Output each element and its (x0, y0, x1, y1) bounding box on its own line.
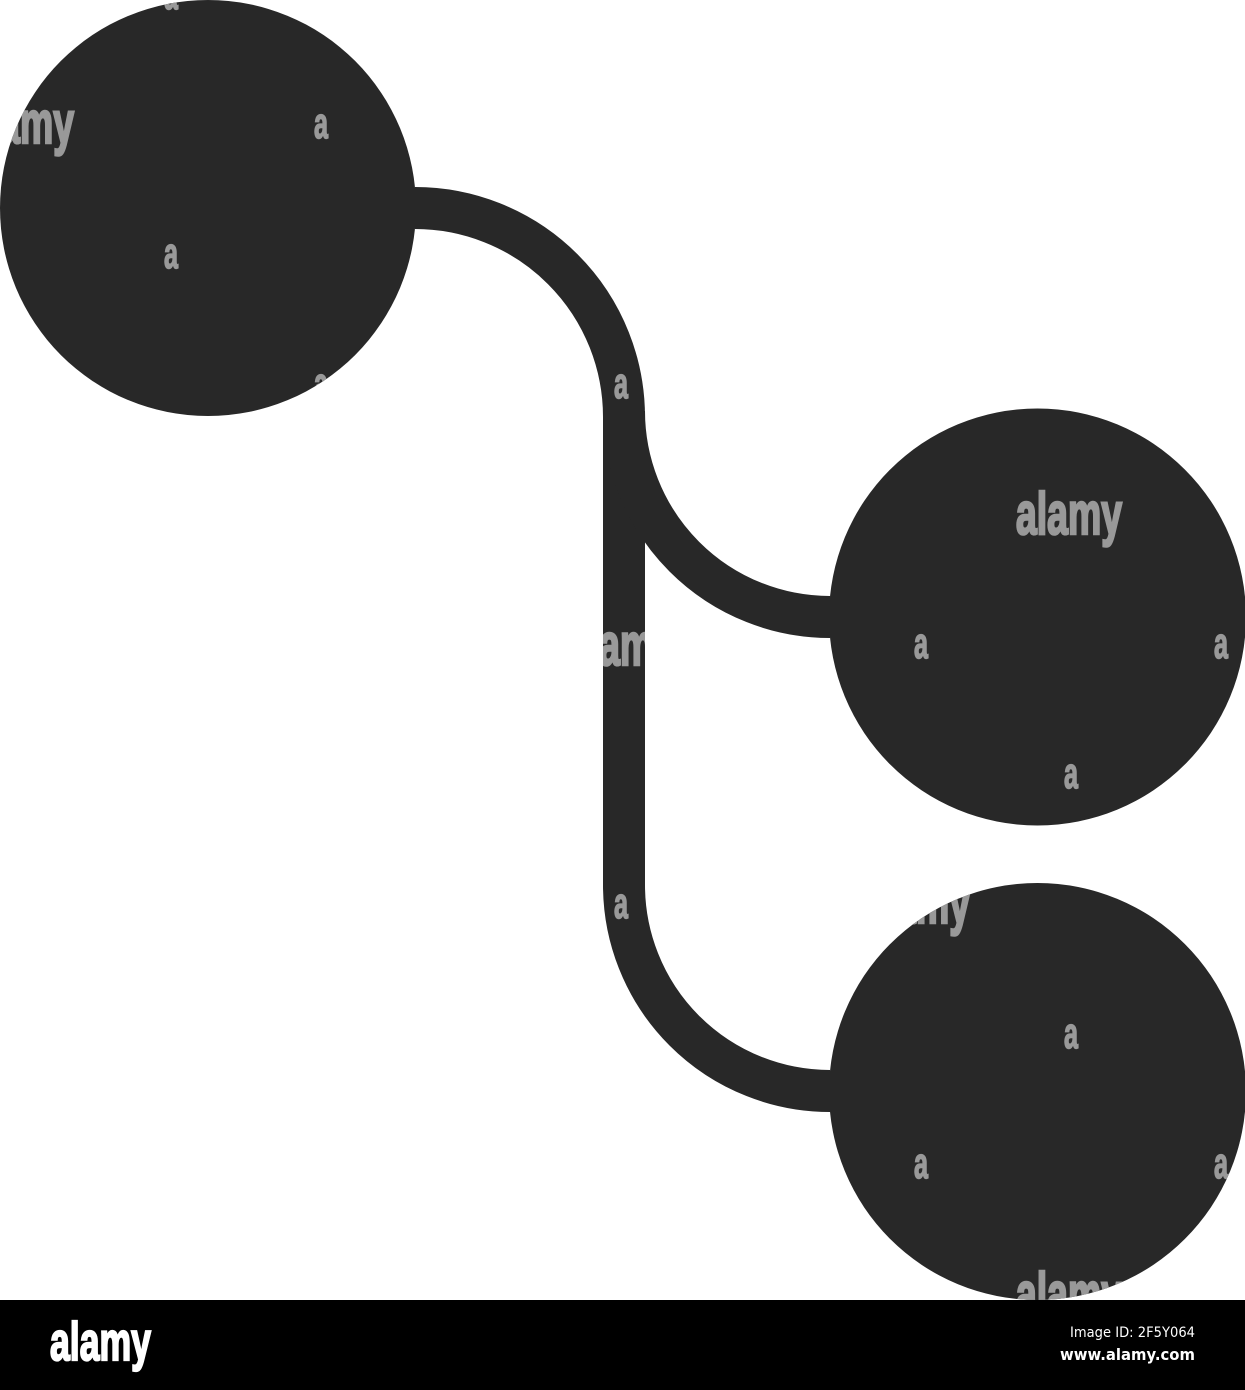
node: middle right circle (829, 408, 1245, 826)
watermark text over the diagram: a (314, 359, 328, 408)
connector: branch to middle node (624, 411, 830, 617)
watermark text over the diagram: alamy (1016, 1261, 1122, 1327)
watermark text over the diagram: alamy (1016, 481, 1122, 547)
watermark text over the diagram: a (1064, 1009, 1078, 1058)
watermark text over the diagram: a (914, 1139, 928, 1188)
watermark text over the diagram: alamy (864, 870, 970, 936)
watermark text over the diagram: alamy (568, 612, 674, 678)
footer logo: alamy (50, 1312, 151, 1372)
node: top left circle (0, 0, 416, 416)
watermark text over the diagram: a (314, 99, 328, 148)
watermark text over the diagram: a (1214, 619, 1228, 668)
watermark text over the diagram: a (614, 359, 628, 408)
watermark text over the diagram: a (1214, 1139, 1228, 1188)
watermark text over the diagram: a (164, 229, 178, 278)
image id: Image ID: 2F5Y064 (1070, 1325, 1195, 1341)
node: bottom right circle (829, 883, 1245, 1300)
website: www.alamy.com (1060, 1345, 1195, 1364)
footer band (0, 1300, 1245, 1390)
connector: curved line from top node to lower nodes (415, 208, 830, 1091)
watermark text over the diagram: a (1064, 749, 1078, 798)
watermark text over the diagram: a (914, 619, 928, 668)
watermark text over the diagram: a (614, 879, 628, 928)
